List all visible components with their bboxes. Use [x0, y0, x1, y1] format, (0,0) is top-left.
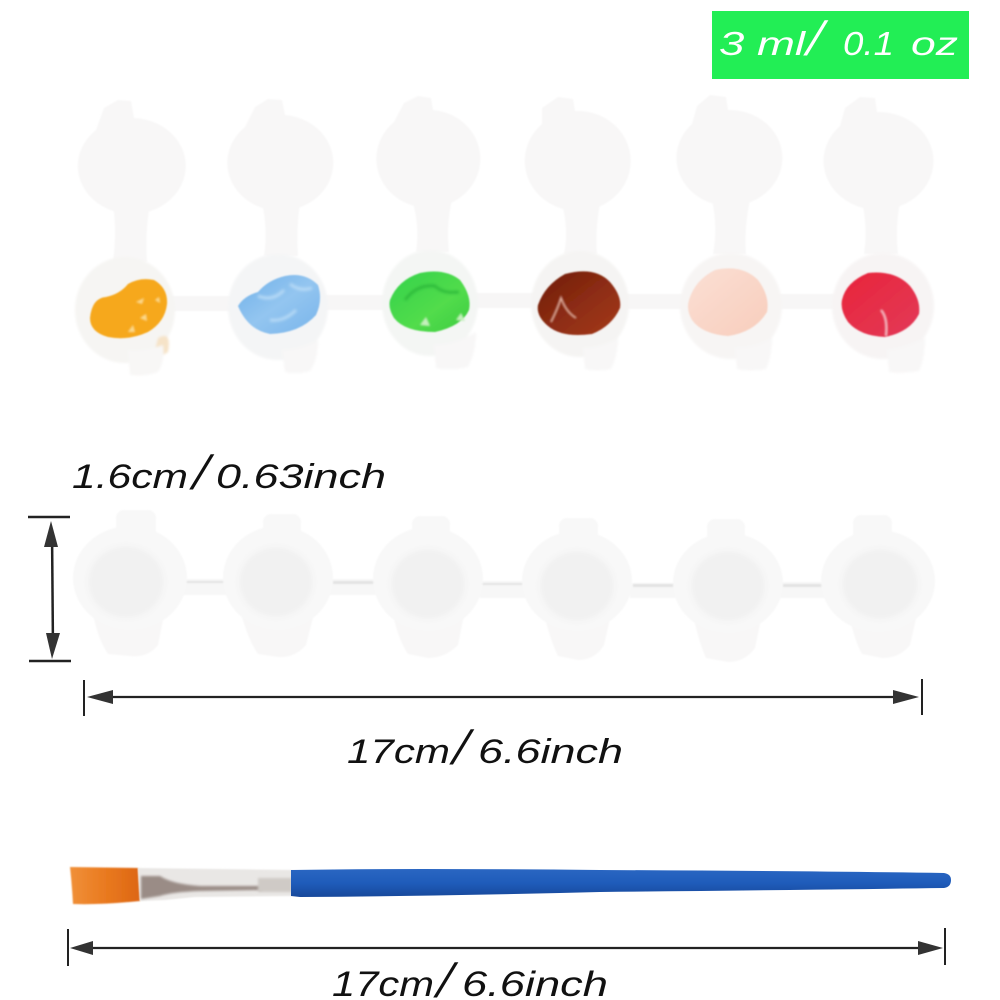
- label: strip length: /: [447, 721, 476, 775]
- badge: capacity: /: [801, 12, 830, 66]
- label: strip length: [347, 721, 623, 775]
- handle: [291, 869, 951, 897]
- arrow: strip length: [84, 679, 922, 716]
- pot 6: [821, 515, 935, 658]
- pot 1: [73, 510, 187, 656]
- photo: open paint pot strip with colours: [75, 95, 934, 376]
- blue paint: [238, 275, 320, 334]
- badge: capacity: 0.1: [843, 25, 894, 62]
- pot 3: [373, 516, 483, 658]
- bristles: [70, 867, 140, 904]
- green paint: [390, 272, 470, 332]
- arrow: brush length: [68, 928, 945, 966]
- badge: capacity: 3 ml: [719, 25, 807, 62]
- peach paint: [688, 268, 768, 336]
- label: pot height: 0.63inch: [216, 458, 386, 496]
- label: pot height: /: [187, 446, 216, 500]
- ferrule: [138, 868, 292, 901]
- connecting bar: [183, 579, 826, 598]
- badge: capacity: [712, 11, 969, 79]
- label: pot height: 1.6cm: [72, 458, 188, 496]
- pot bodies: [75, 250, 934, 376]
- photo: closed paint pot strip: [73, 510, 935, 662]
- arrow: pot height: [28, 517, 71, 661]
- label: brush length: [332, 954, 608, 1000]
- badge: capacity: oz: [911, 25, 959, 62]
- red paint: [842, 273, 919, 337]
- pot 2: [223, 514, 333, 657]
- connecting strip: [170, 293, 838, 311]
- label: strip length: 6.6inch: [478, 733, 623, 771]
- pot 4: [522, 518, 632, 660]
- brown paint: [538, 271, 620, 335]
- label: pot height: [72, 446, 386, 500]
- photo: paint brush: [70, 867, 951, 904]
- open lids: [78, 95, 934, 262]
- label: strip length: 17cm: [347, 733, 450, 771]
- yellow paint: [90, 279, 167, 338]
- pot 5: [673, 519, 783, 662]
